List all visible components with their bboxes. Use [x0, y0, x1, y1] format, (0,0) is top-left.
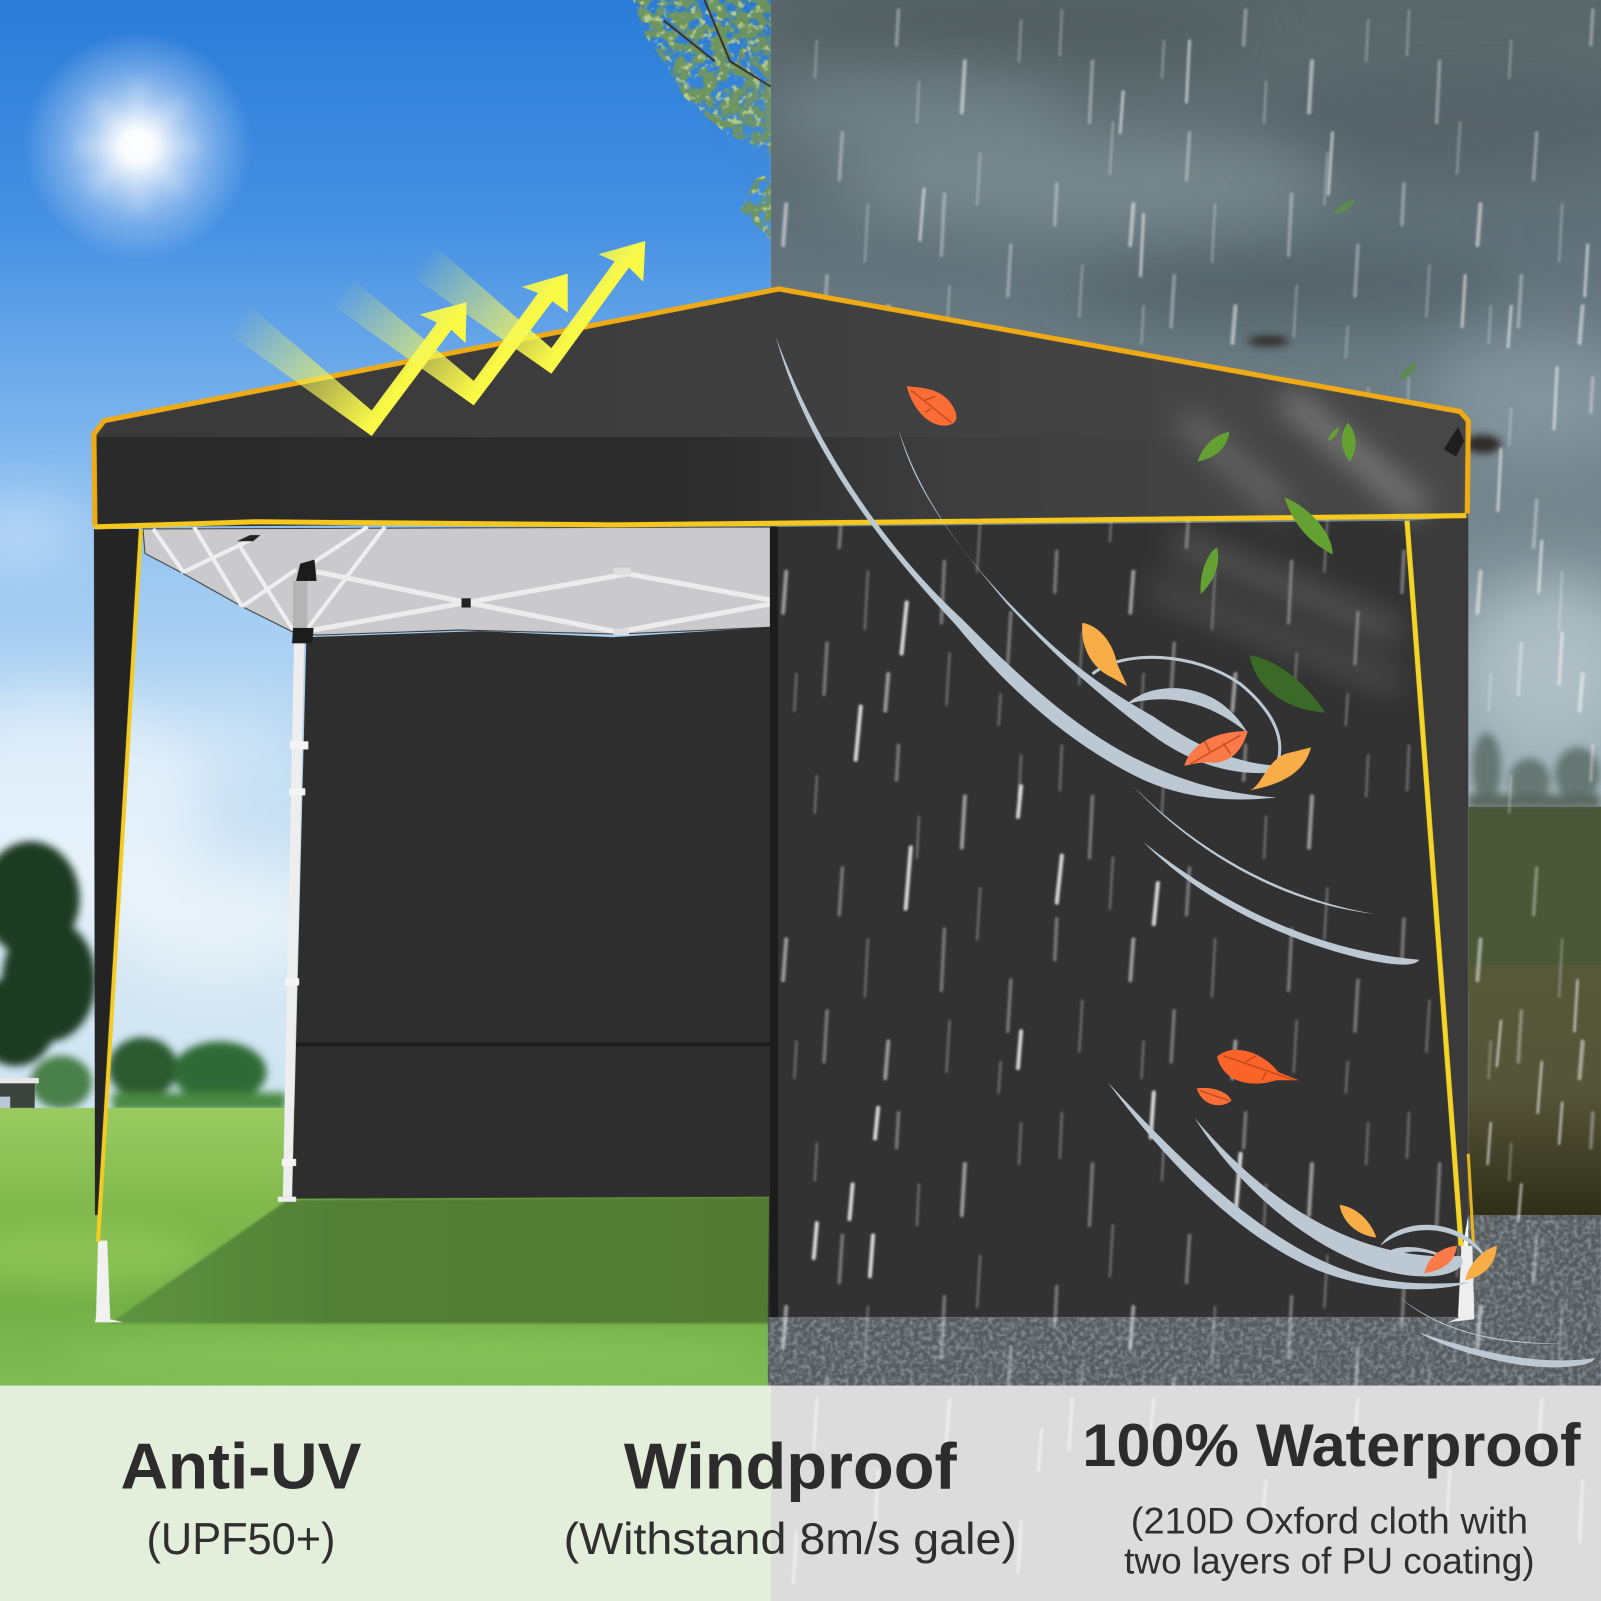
rain streaks: [814, 41, 1588, 1276]
wind light streaks: [1154, 396, 1422, 684]
front wall panel: [768, 521, 1461, 1317]
right side drape: [1407, 517, 1468, 1251]
arrow 2: [327, 274, 568, 405]
left side drape: [94, 529, 142, 1215]
feature: 100% Waterproof: two layers of PU coating): [1124, 1540, 1535, 1581]
green leaves: [1198, 199, 1417, 713]
scene background: sunny half: [0, 0, 771, 1387]
wind swirl upper: [776, 337, 1280, 799]
roof top: [95, 289, 1468, 527]
back wall panel: [292, 627, 774, 1199]
distant storm trees: [1468, 733, 1601, 809]
flying debris: [1248, 336, 1501, 453]
tent: [94, 289, 1474, 1322]
wind swirl middle: [1133, 786, 1419, 965]
scene background: stormy half: [766, 0, 1601, 1387]
tree branch: [631, 0, 771, 241]
feature: Windproof: (Withstand 8m/s gale): [564, 1513, 1017, 1564]
yellow trim: [94, 289, 1473, 1246]
anti-UV arrows: [227, 241, 645, 436]
golf cart: [0, 1078, 39, 1112]
field: [1468, 807, 1601, 990]
feature: 100% Waterproof: (210D Oxford cloth with: [1131, 1501, 1528, 1542]
leaf veins: [911, 390, 1295, 1101]
wall rain: [778, 521, 1461, 1317]
left front leg: [95, 1241, 124, 1322]
orange leaves: [907, 386, 1457, 1273]
leaves: [907, 199, 1497, 1280]
canopy underside: [143, 527, 776, 635]
corner bracket: [1444, 427, 1464, 456]
strip background right: [771, 1386, 1601, 1601]
arrow 3: [408, 241, 645, 374]
arrow 1: [227, 302, 467, 436]
feature: Anti-UV: (UPF50+): [147, 1513, 335, 1564]
feature: Windproof: [564, 1430, 1017, 1564]
feature: 100% Waterproof: 100% Waterproof: [1082, 1411, 1582, 1479]
right front leg: [1448, 1246, 1474, 1322]
feature: Anti-UV: Anti-UV: [120, 1430, 362, 1503]
amber leaves: [1082, 623, 1497, 1280]
grass bushes: [1468, 965, 1601, 1218]
feature: Anti-UV: [120, 1430, 362, 1564]
feature: Windproof: Windproof: [624, 1430, 957, 1503]
grass: [0, 1108, 771, 1387]
bottom strip: features: [0, 1386, 1601, 1601]
wind swirl lower: [1108, 1082, 1595, 1367]
icon: sun: [23, 32, 252, 260]
distant trees: [0, 841, 286, 1111]
front valance: [95, 437, 1468, 527]
rear corner pole: [278, 560, 317, 1202]
strip background left: [0, 1386, 771, 1601]
sky rain: [771, 0, 1601, 1387]
gravel ground: [1468, 1215, 1601, 1387]
tent shadow on grass: [110, 1197, 771, 1323]
feature: 100% Waterproof: [1082, 1411, 1582, 1581]
